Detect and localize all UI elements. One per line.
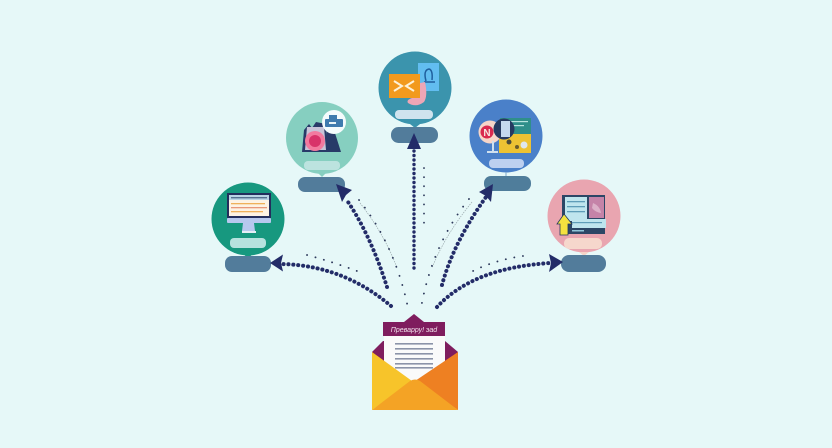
arrow: to dashboard xyxy=(442,184,493,285)
pill xyxy=(225,256,271,272)
envelope right panel xyxy=(415,352,458,410)
node 3: mail and note xyxy=(378,52,452,143)
small dotted lines xyxy=(307,168,523,308)
label placeholder xyxy=(395,110,433,119)
letter sheet xyxy=(384,336,445,388)
arrow: to camera bag xyxy=(336,184,387,287)
label placeholder xyxy=(489,159,524,168)
icon: monitor xyxy=(227,193,271,233)
arrow: to monitor xyxy=(270,254,391,306)
pill xyxy=(391,127,438,143)
label placeholder xyxy=(230,238,266,248)
banner text: Преварру! эad xyxy=(391,327,438,334)
icon: open envelope xyxy=(372,314,458,410)
label placeholder xyxy=(304,161,340,170)
thin dashed guides xyxy=(360,202,472,268)
pill xyxy=(484,176,531,191)
envelope bottom panel xyxy=(372,380,458,410)
label placeholder xyxy=(564,238,602,249)
arrow: to upload page xyxy=(437,254,563,307)
text lines xyxy=(395,343,433,369)
icon: envelope and blue card xyxy=(389,63,439,105)
purple banner xyxy=(383,314,445,336)
icon: bag and tag xyxy=(302,110,346,152)
node 4: dashboard and badge xyxy=(470,100,542,191)
icon: dashboard: N xyxy=(483,128,491,139)
icon: page with upload arrow xyxy=(557,195,606,235)
pill xyxy=(298,177,345,192)
envelope left panel xyxy=(372,352,412,410)
node 2: camera bag xyxy=(286,102,358,192)
node 5: upload page xyxy=(548,180,620,272)
node 1: monitor xyxy=(212,182,284,272)
pill xyxy=(561,255,606,272)
arrow: straight up xyxy=(407,133,421,268)
